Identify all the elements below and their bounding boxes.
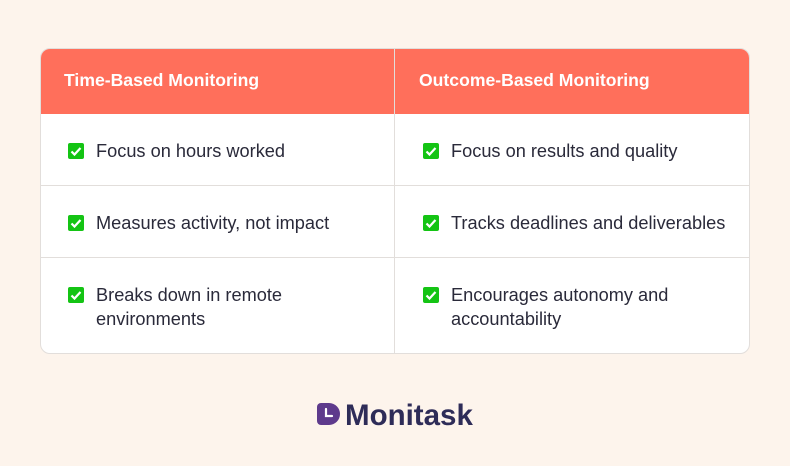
item: breaks down: environments bbox=[96, 309, 205, 329]
header row: Time-Based Monitoring bbox=[64, 70, 259, 90]
item: encourages autonomy bbox=[423, 285, 668, 329]
item: breaks down: Breaks down in remote bbox=[96, 285, 282, 305]
item: encourages autonomy: accountability bbox=[451, 309, 561, 329]
item: encourages autonomy: Encourages autonomy and bbox=[451, 285, 668, 305]
item: measures activity: Measures activity, not impact bbox=[96, 213, 329, 233]
item: breaks down bbox=[68, 285, 282, 329]
item: tracks deadlines: Tracks deadlines and deliverables bbox=[451, 213, 725, 233]
item: focus on results: Focus on results and quality bbox=[451, 141, 677, 161]
item: focus on hours: Focus on hours worked bbox=[96, 141, 285, 161]
header row: Outcome-Based Monitoring bbox=[419, 70, 650, 90]
comparison table bbox=[40, 48, 750, 354]
header row bbox=[41, 49, 749, 114]
logo: Monitask: Monitask bbox=[345, 399, 473, 432]
